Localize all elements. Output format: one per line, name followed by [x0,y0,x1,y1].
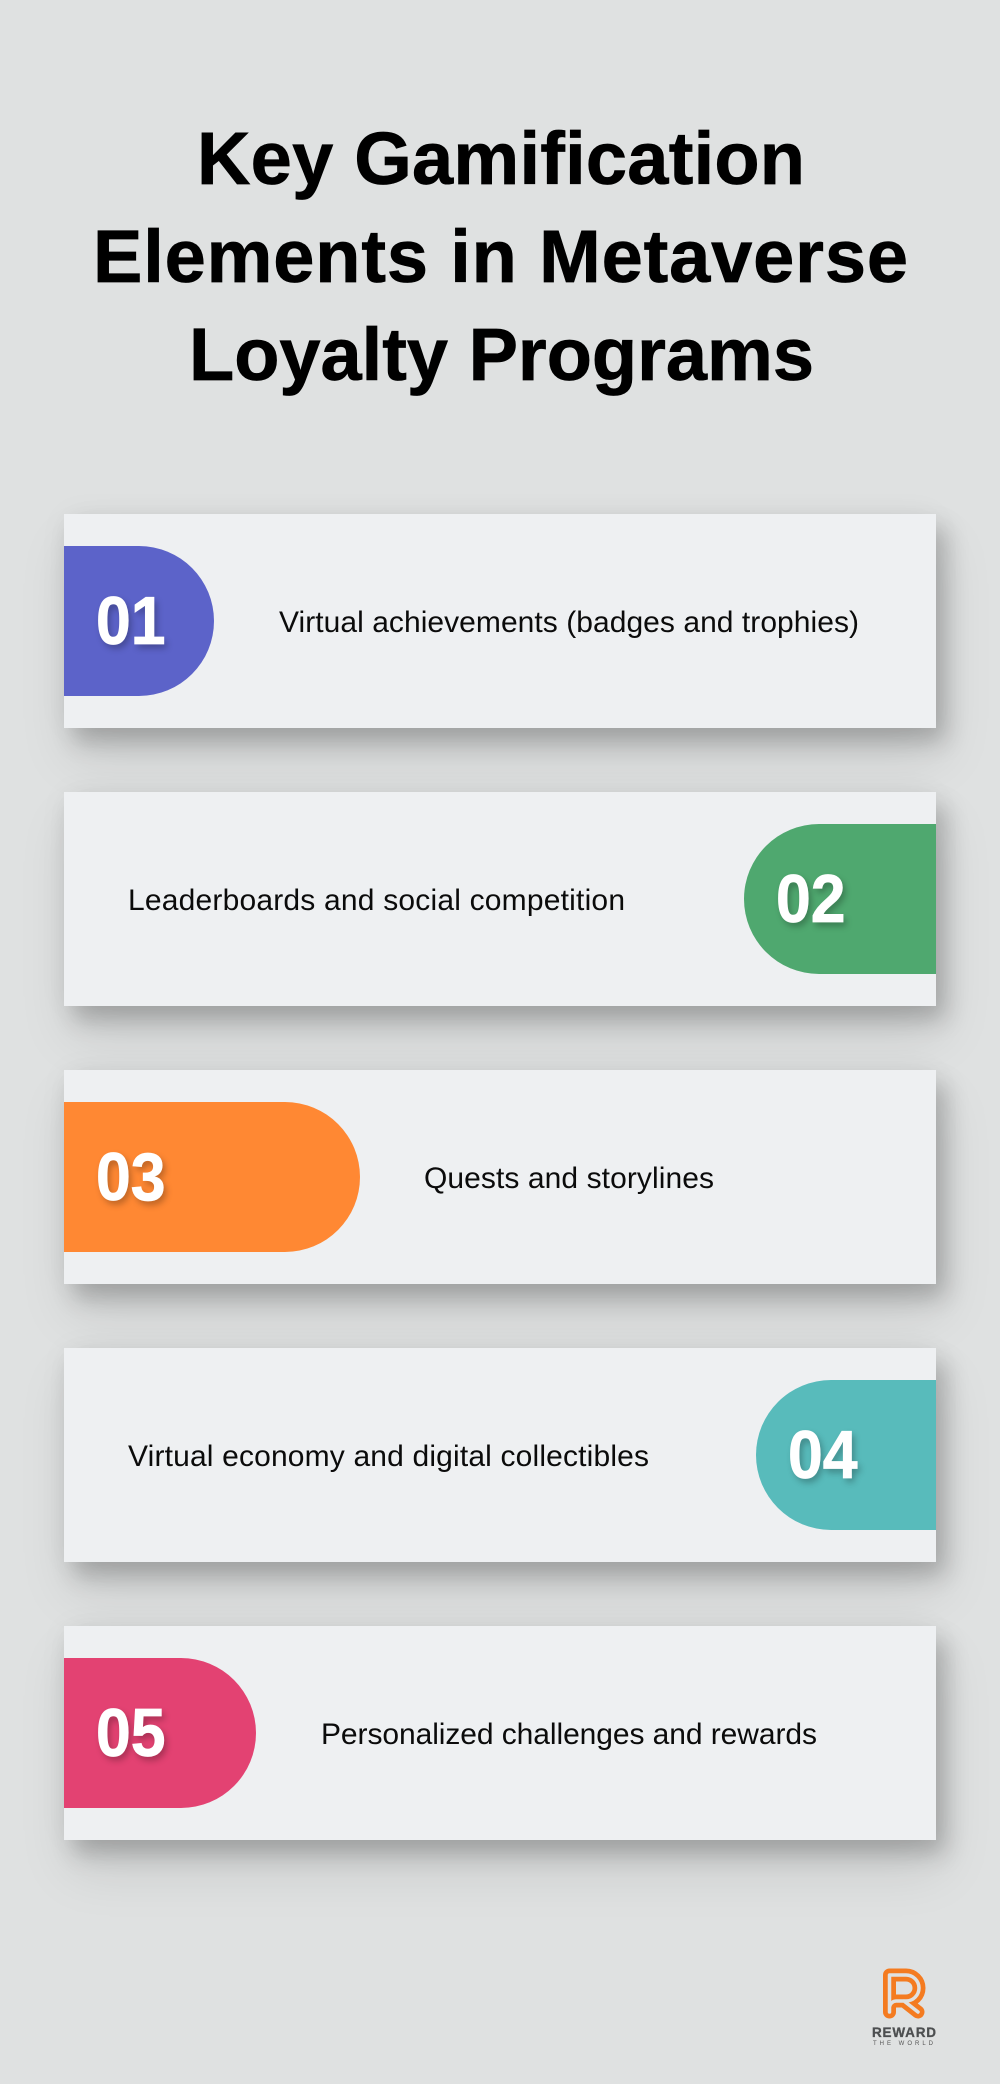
title [93,117,908,396]
logo wordmark [872,2025,936,2047]
badge: 01 [64,546,214,696]
logo wordmark: REWARD [872,2025,936,2040]
logo: Reward the World [872,1968,936,2047]
badge: 04 [756,1380,936,1530]
icon: R mark [890,1975,919,2012]
title: Key Gamification [197,117,805,200]
title: Elements in Metaverse [93,215,908,298]
logo wordmark: THE WORLD [873,2041,934,2047]
number 01: 01 [96,583,166,659]
number 03: 03 [96,1139,166,1215]
text: item 01: Virtual achievements (badges and trophies) [279,606,859,639]
panel: item 02 [64,792,936,1006]
panel: item 03 [64,1070,936,1284]
number 02: 02 [776,861,846,937]
text: item 02: Leaderboards and social competition [128,884,625,917]
number 05: 05 [96,1695,166,1771]
panel: item 05 [64,1626,936,1840]
badge: 05 [64,1658,256,1808]
badge: 03 [64,1102,360,1252]
panel: item 01 [64,514,936,728]
text: item 05: Personalized challenges and rewards [321,1718,817,1751]
panel: item 04 [64,1348,936,1562]
badge: 02 [744,824,936,974]
text: item 03: Quests and storylines [424,1162,714,1195]
text: item 04: Virtual economy and digital collectibles [128,1440,649,1473]
number 04: 04 [788,1417,858,1493]
title: Loyalty Programs [189,313,814,396]
